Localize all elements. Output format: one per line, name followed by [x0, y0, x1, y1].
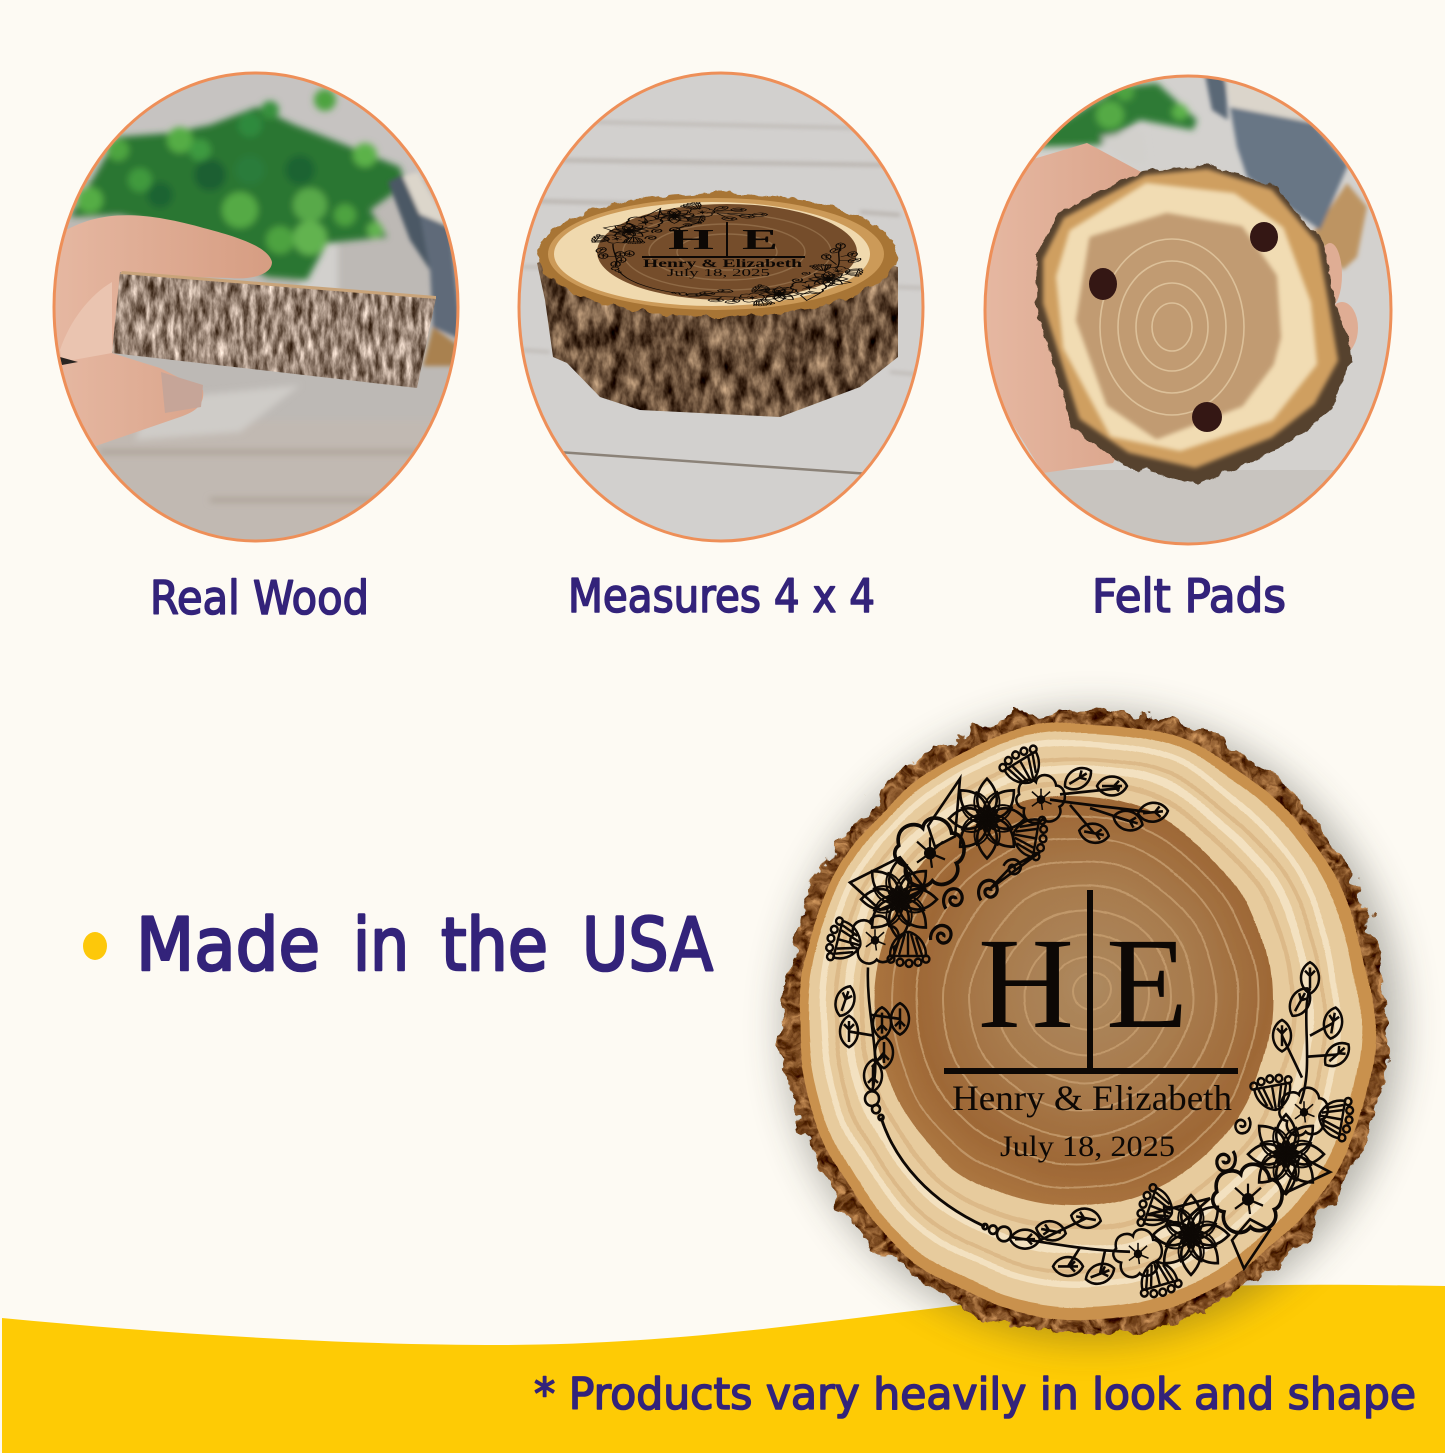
panel: measures photo — [515, 70, 930, 550]
coaster top — [537, 193, 897, 317]
felt pads — [1089, 222, 1278, 432]
coaster shadow — [784, 712, 1400, 1340]
footnote: * Products vary heavily in look and shape — [534, 1369, 1416, 1420]
monogram: E — [1106, 912, 1188, 1056]
mug — [388, 172, 462, 366]
plant — [1037, 83, 1197, 163]
heartwood — [873, 796, 1271, 1206]
coaster side — [537, 262, 898, 417]
heading: Made in the USA — [136, 903, 713, 988]
bark rim — [784, 708, 1388, 1336]
hand — [50, 215, 272, 447]
small monogram: E — [742, 225, 778, 256]
heading: Made in the USA: Made — [136, 903, 320, 988]
small monogram — [642, 222, 805, 279]
plant — [70, 89, 405, 280]
small monogram: July 18, 2025 — [667, 268, 770, 279]
monogram: H — [978, 912, 1074, 1056]
large engraved coaster — [784, 708, 1388, 1336]
hand — [986, 143, 1141, 473]
sapwood — [799, 724, 1373, 1320]
small monogram: Henry & Elizabeth — [643, 256, 803, 270]
coaster underside — [1037, 167, 1350, 482]
heading: Made in the USA: USA — [582, 903, 713, 988]
caption: Real Wood: Real Wood — [150, 571, 369, 625]
date: July 18, 2025 — [1000, 1130, 1175, 1163]
caption: Measures 4 x 4: Measures 4 x 4 — [568, 569, 875, 623]
small monogram: H — [668, 225, 714, 256]
panel: felt pads photo — [980, 70, 1400, 550]
caption: Felt Pads: Felt Pads — [1092, 569, 1286, 623]
names: Henry & Elizabeth — [952, 1078, 1232, 1118]
heading: Made in the USA: the — [441, 903, 548, 988]
small wreath — [590, 201, 864, 307]
yellow wave band — [2, 1285, 1445, 1453]
wreath — [822, 741, 1356, 1301]
mug — [1204, 70, 1367, 270]
heading: Made in the USA: in — [353, 903, 409, 988]
fingers — [1324, 243, 1342, 304]
bark slab — [112, 272, 436, 388]
panel: real wood photo — [50, 70, 465, 550]
monogram — [944, 890, 1238, 1074]
bullet dot — [83, 932, 107, 960]
